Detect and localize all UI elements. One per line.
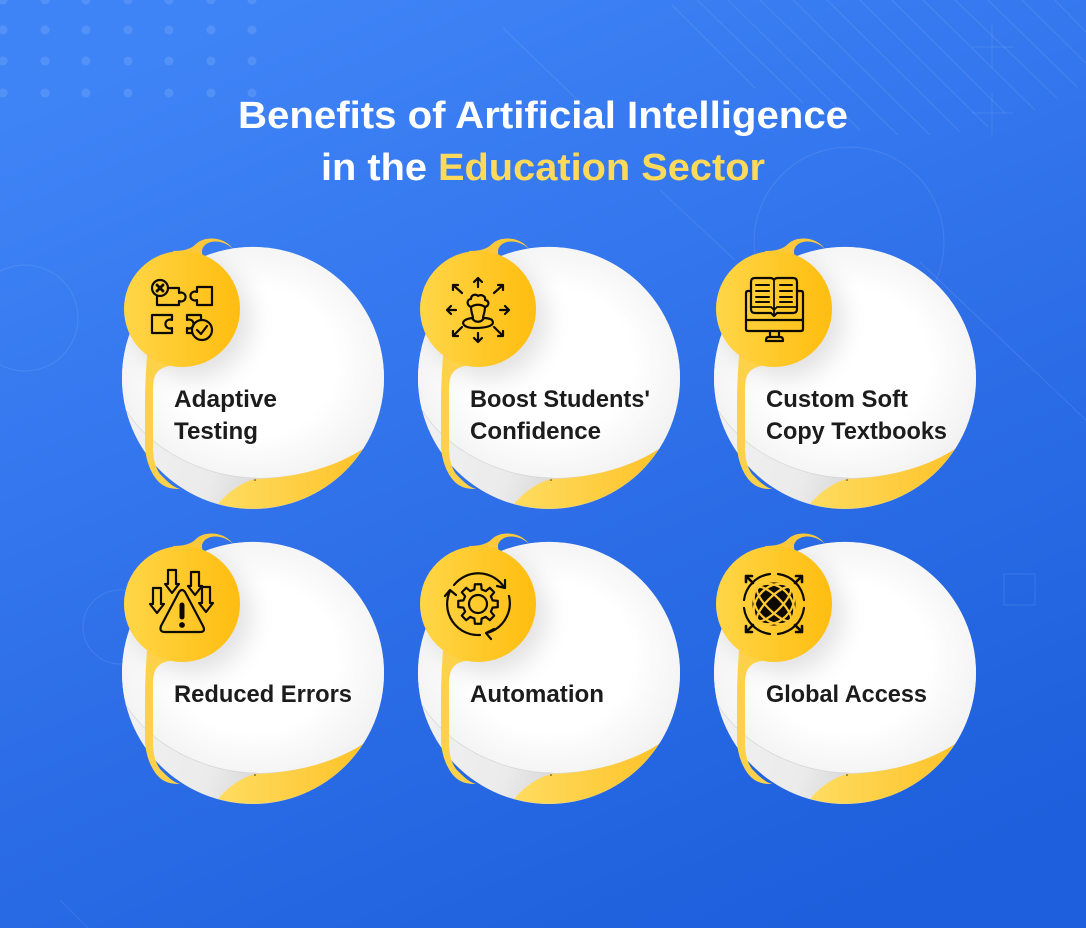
panel: Custom Soft Copy Textbooks — [714, 239, 976, 509]
panel: Reduced Errors — [122, 534, 384, 804]
label — [174, 386, 277, 445]
label: Copy Textbooks — [766, 418, 947, 445]
icon: puzzle pieces — [152, 280, 212, 340]
label: Boost Students' — [470, 386, 650, 413]
icon: warning triangle with arrows — [150, 570, 213, 632]
label: Custom Soft — [766, 386, 908, 413]
icon: person with radiating arrows — [447, 278, 509, 342]
label: Reduced Errors — [174, 681, 352, 708]
label — [766, 386, 947, 445]
background decoration: dot grid — [0, 0, 256, 98]
label: Testing — [174, 418, 258, 445]
panel: Boost Students' Confidence — [418, 239, 680, 509]
title: Education Sector — [438, 147, 765, 189]
label — [470, 386, 650, 445]
title: in the — [321, 147, 427, 189]
title — [238, 95, 848, 189]
label: Adaptive — [174, 386, 277, 413]
panel: Adaptive Testing — [122, 239, 384, 509]
icon: globe with corner arrows — [744, 574, 804, 634]
title: Benefits of Artificial Intelligence — [238, 95, 848, 137]
icon: book on monitor — [746, 278, 803, 341]
panel: Automation — [418, 534, 680, 804]
label: Confidence — [470, 418, 601, 445]
label: Global Access — [766, 681, 927, 708]
panel: Global Access — [714, 534, 976, 804]
label: Automation — [470, 681, 604, 708]
icon: gear with cycle arrows — [445, 573, 510, 639]
